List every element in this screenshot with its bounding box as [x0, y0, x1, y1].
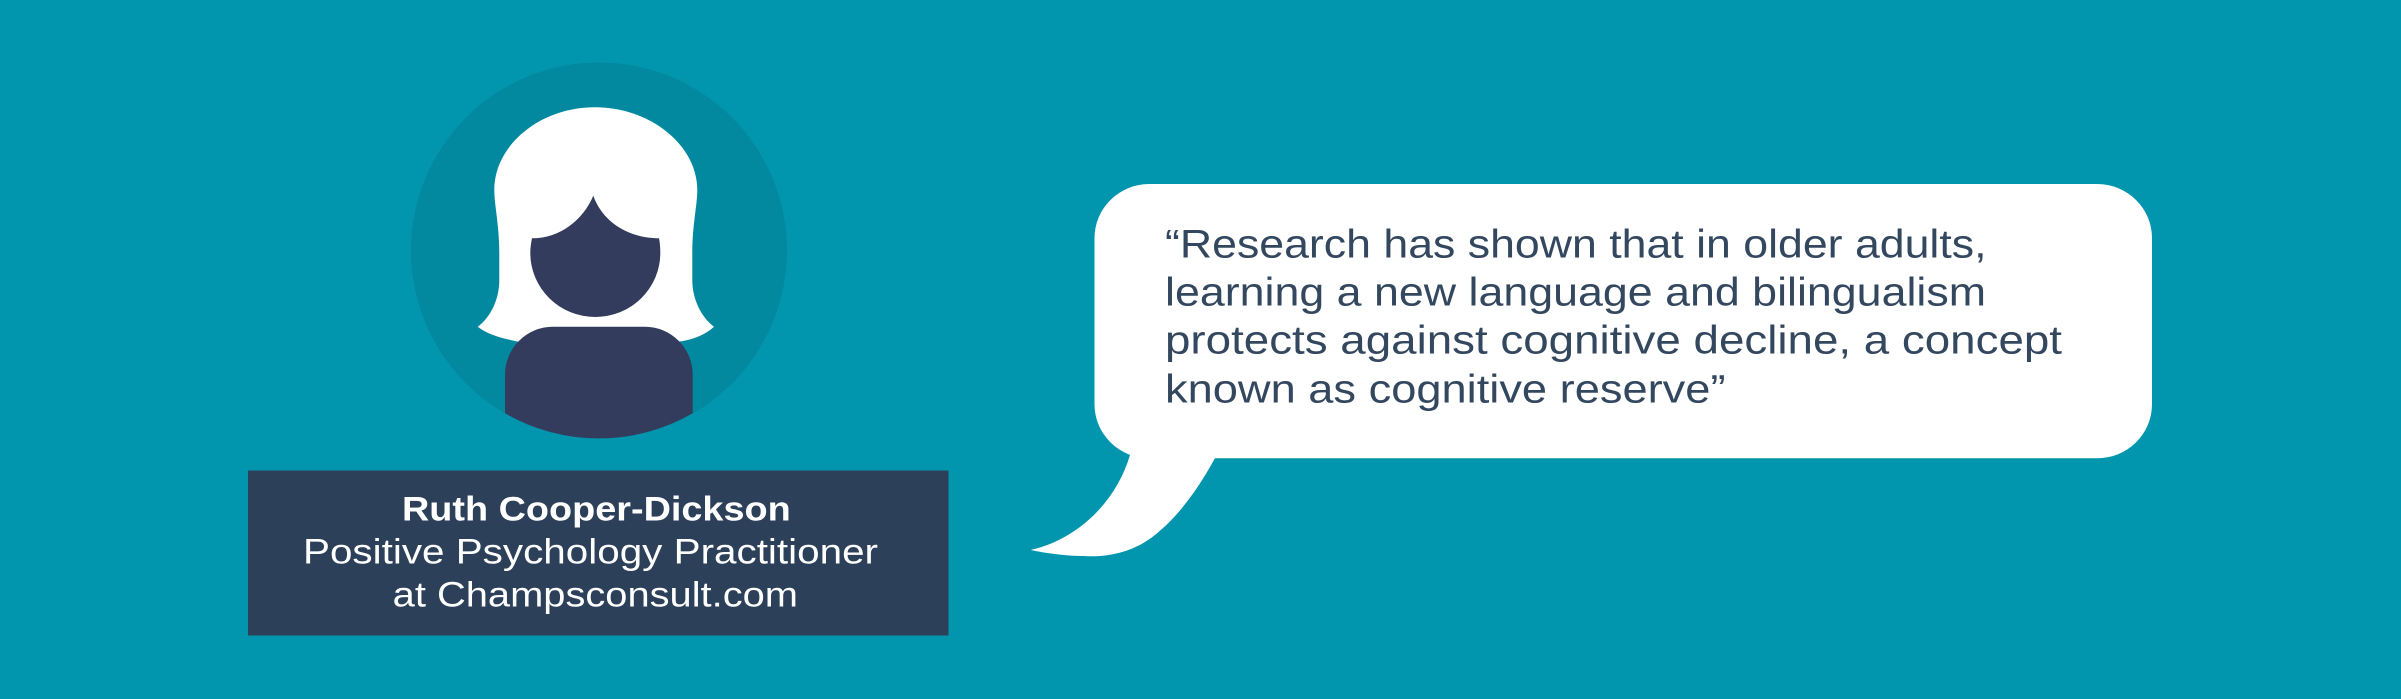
name plate	[248, 470, 948, 636]
name: Ruth Cooper-Dickson	[402, 491, 791, 529]
website: at Champsconsult.com	[393, 576, 798, 615]
quote text: known as cognitive reserve”	[1165, 367, 1726, 411]
speech bubble	[1031, 184, 2152, 556]
icon: woman avatar	[411, 62, 787, 438]
quote text: learning a new language and bilingualism	[1165, 270, 1986, 314]
quote text: protects against cognitive decline, a concept	[1165, 318, 2062, 362]
quote text: “Research has shown that in older adults,	[1165, 223, 1986, 267]
job title: Positive Psychology Practitioner	[303, 532, 878, 571]
quote text	[1165, 223, 2062, 411]
